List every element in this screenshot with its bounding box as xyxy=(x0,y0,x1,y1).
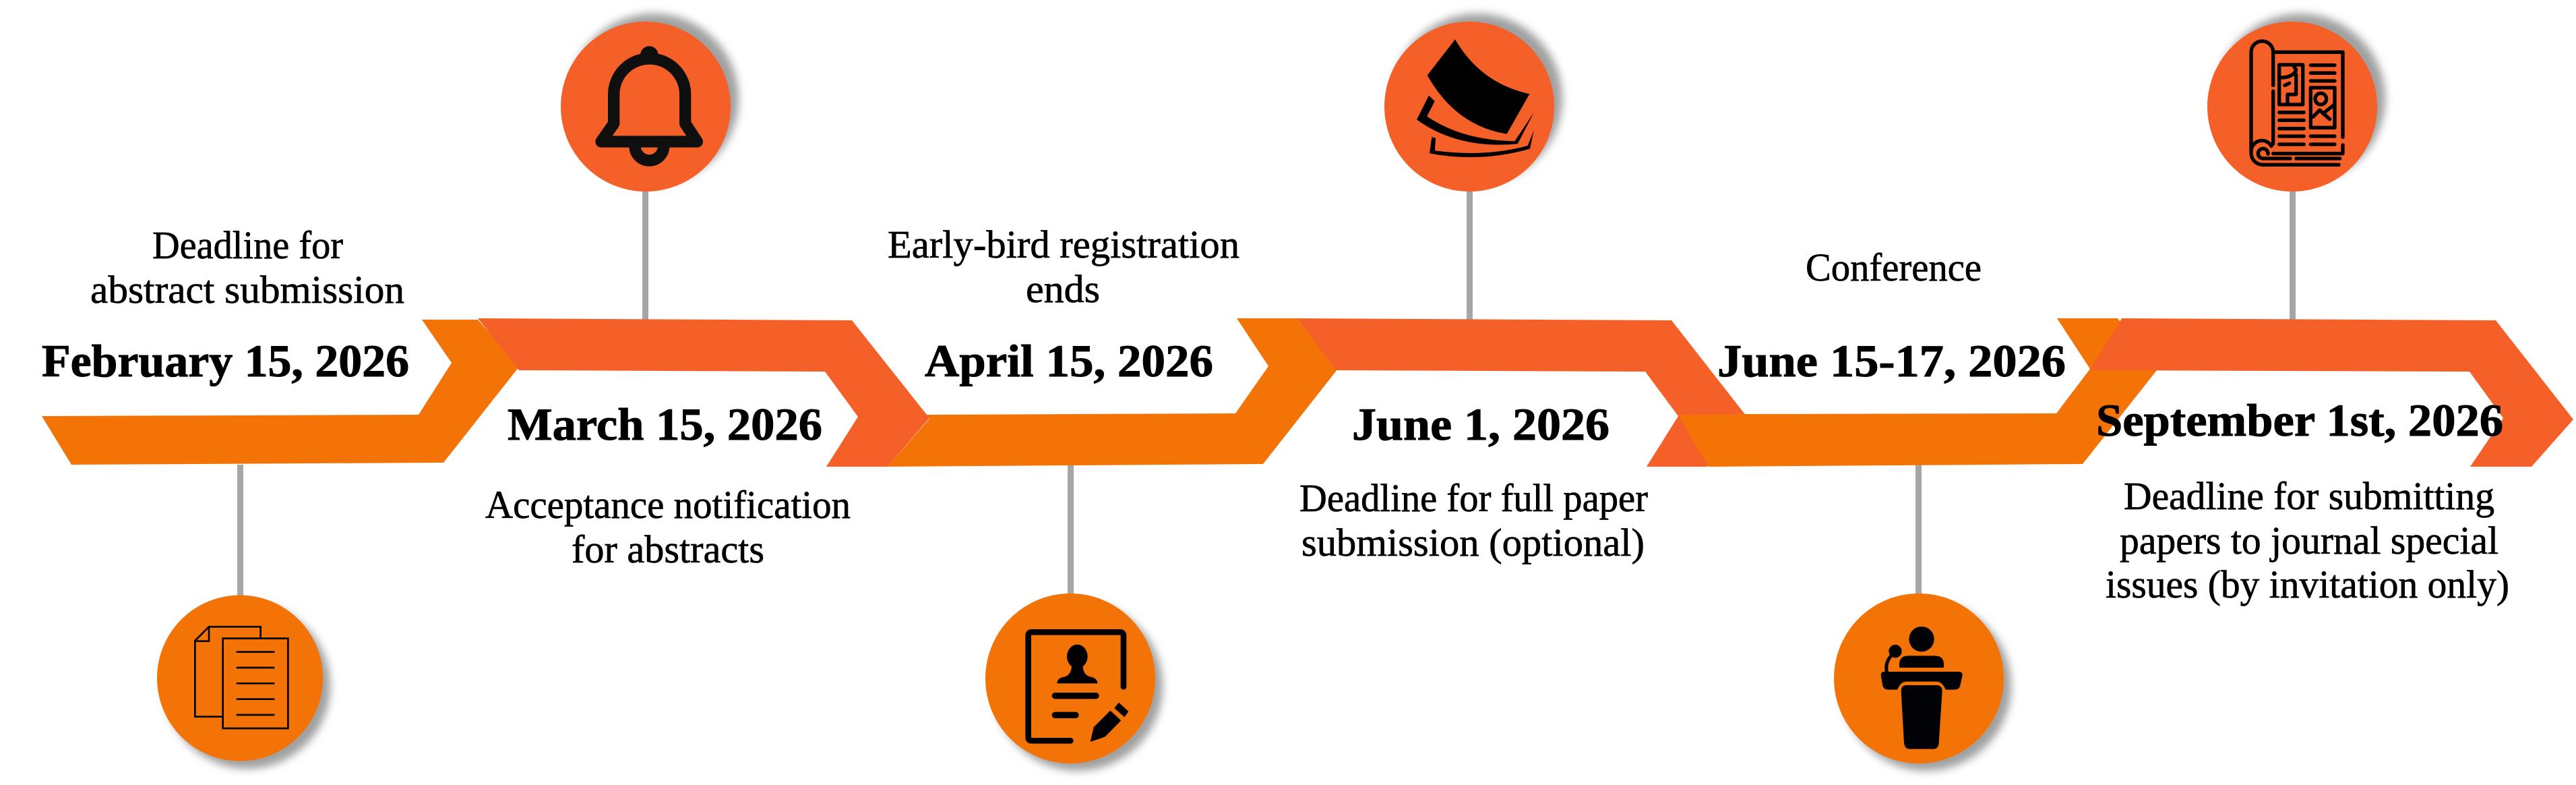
chevron 6 red xyxy=(2090,318,2573,467)
chevron 1 orange xyxy=(42,320,519,465)
milestone 3: April 15 xyxy=(888,223,1239,386)
milestone 5: June 15-17 xyxy=(1717,245,2066,386)
description: journal special issues: papers to journal special xyxy=(2120,519,2498,562)
date: September 1st, 2026: September 1st, 2026 xyxy=(2096,395,2503,446)
description: acceptance notification xyxy=(485,483,851,571)
icon circle: journal xyxy=(2207,13,2385,192)
icon: speaker at podium xyxy=(1881,627,1963,749)
milestone 1: February 15 xyxy=(42,223,409,386)
chevron ribbon xyxy=(42,318,2573,467)
icon: journal xyxy=(2251,41,2343,165)
description: early-bird registration xyxy=(888,223,1239,311)
chevron 2 red xyxy=(478,318,929,467)
description: abstract submission: Deadline for xyxy=(152,223,343,267)
date: April 15, 2026: April 15, 2026 xyxy=(925,335,1213,386)
date: June 15-17, 2026: June 15-17, 2026 xyxy=(1717,335,2066,386)
date: February 15, 2026: February 15, 2026 xyxy=(42,335,409,386)
milestone 6: September 1st xyxy=(2096,395,2509,606)
chevron 5 orange xyxy=(1678,318,2157,467)
icon: documents xyxy=(195,627,288,728)
description: acceptance notification: for abstracts xyxy=(572,527,764,571)
description: journal special issues: issues (by invitation only) xyxy=(2106,562,2509,606)
description: early-bird registration: ends xyxy=(1026,267,1100,311)
icon circle: documents xyxy=(157,595,330,769)
date: March 15, 2026: March 15, 2026 xyxy=(508,399,822,450)
chevron 3 orange xyxy=(888,318,1340,467)
icon circle: registration form xyxy=(985,593,1163,771)
icon circle: bell xyxy=(561,13,739,192)
description: full paper submission: submission (optional) xyxy=(1301,521,1645,564)
description: journal special issues xyxy=(2106,474,2509,606)
description: conference: Conference xyxy=(1806,245,1982,289)
description: early-bird registration: Early-bird registration xyxy=(888,223,1239,266)
date: June 1, 2026: June 1, 2026 xyxy=(1352,399,1609,450)
description: journal special issues: Deadline for submitting xyxy=(2124,474,2494,518)
milestone 2: March 15 xyxy=(485,399,851,571)
connector lines xyxy=(237,101,2296,600)
chevron 4 red xyxy=(1297,318,1749,467)
icon circle: speaker at podium xyxy=(1834,593,2011,771)
description: full paper submission: Deadline for full paper xyxy=(1299,476,1648,520)
description: acceptance notification: Acceptance notification xyxy=(485,483,851,527)
icon: bell xyxy=(601,46,697,161)
icon: paper stack xyxy=(1417,39,1534,157)
icon circle: paper stack xyxy=(1384,13,1562,192)
description: abstract submission: abstract submission xyxy=(90,268,404,312)
milestone 4: June 1 xyxy=(1299,399,1648,564)
description: abstract submission xyxy=(90,223,404,312)
description: full paper submission xyxy=(1299,476,1648,564)
icon: registration form xyxy=(1029,632,1128,742)
